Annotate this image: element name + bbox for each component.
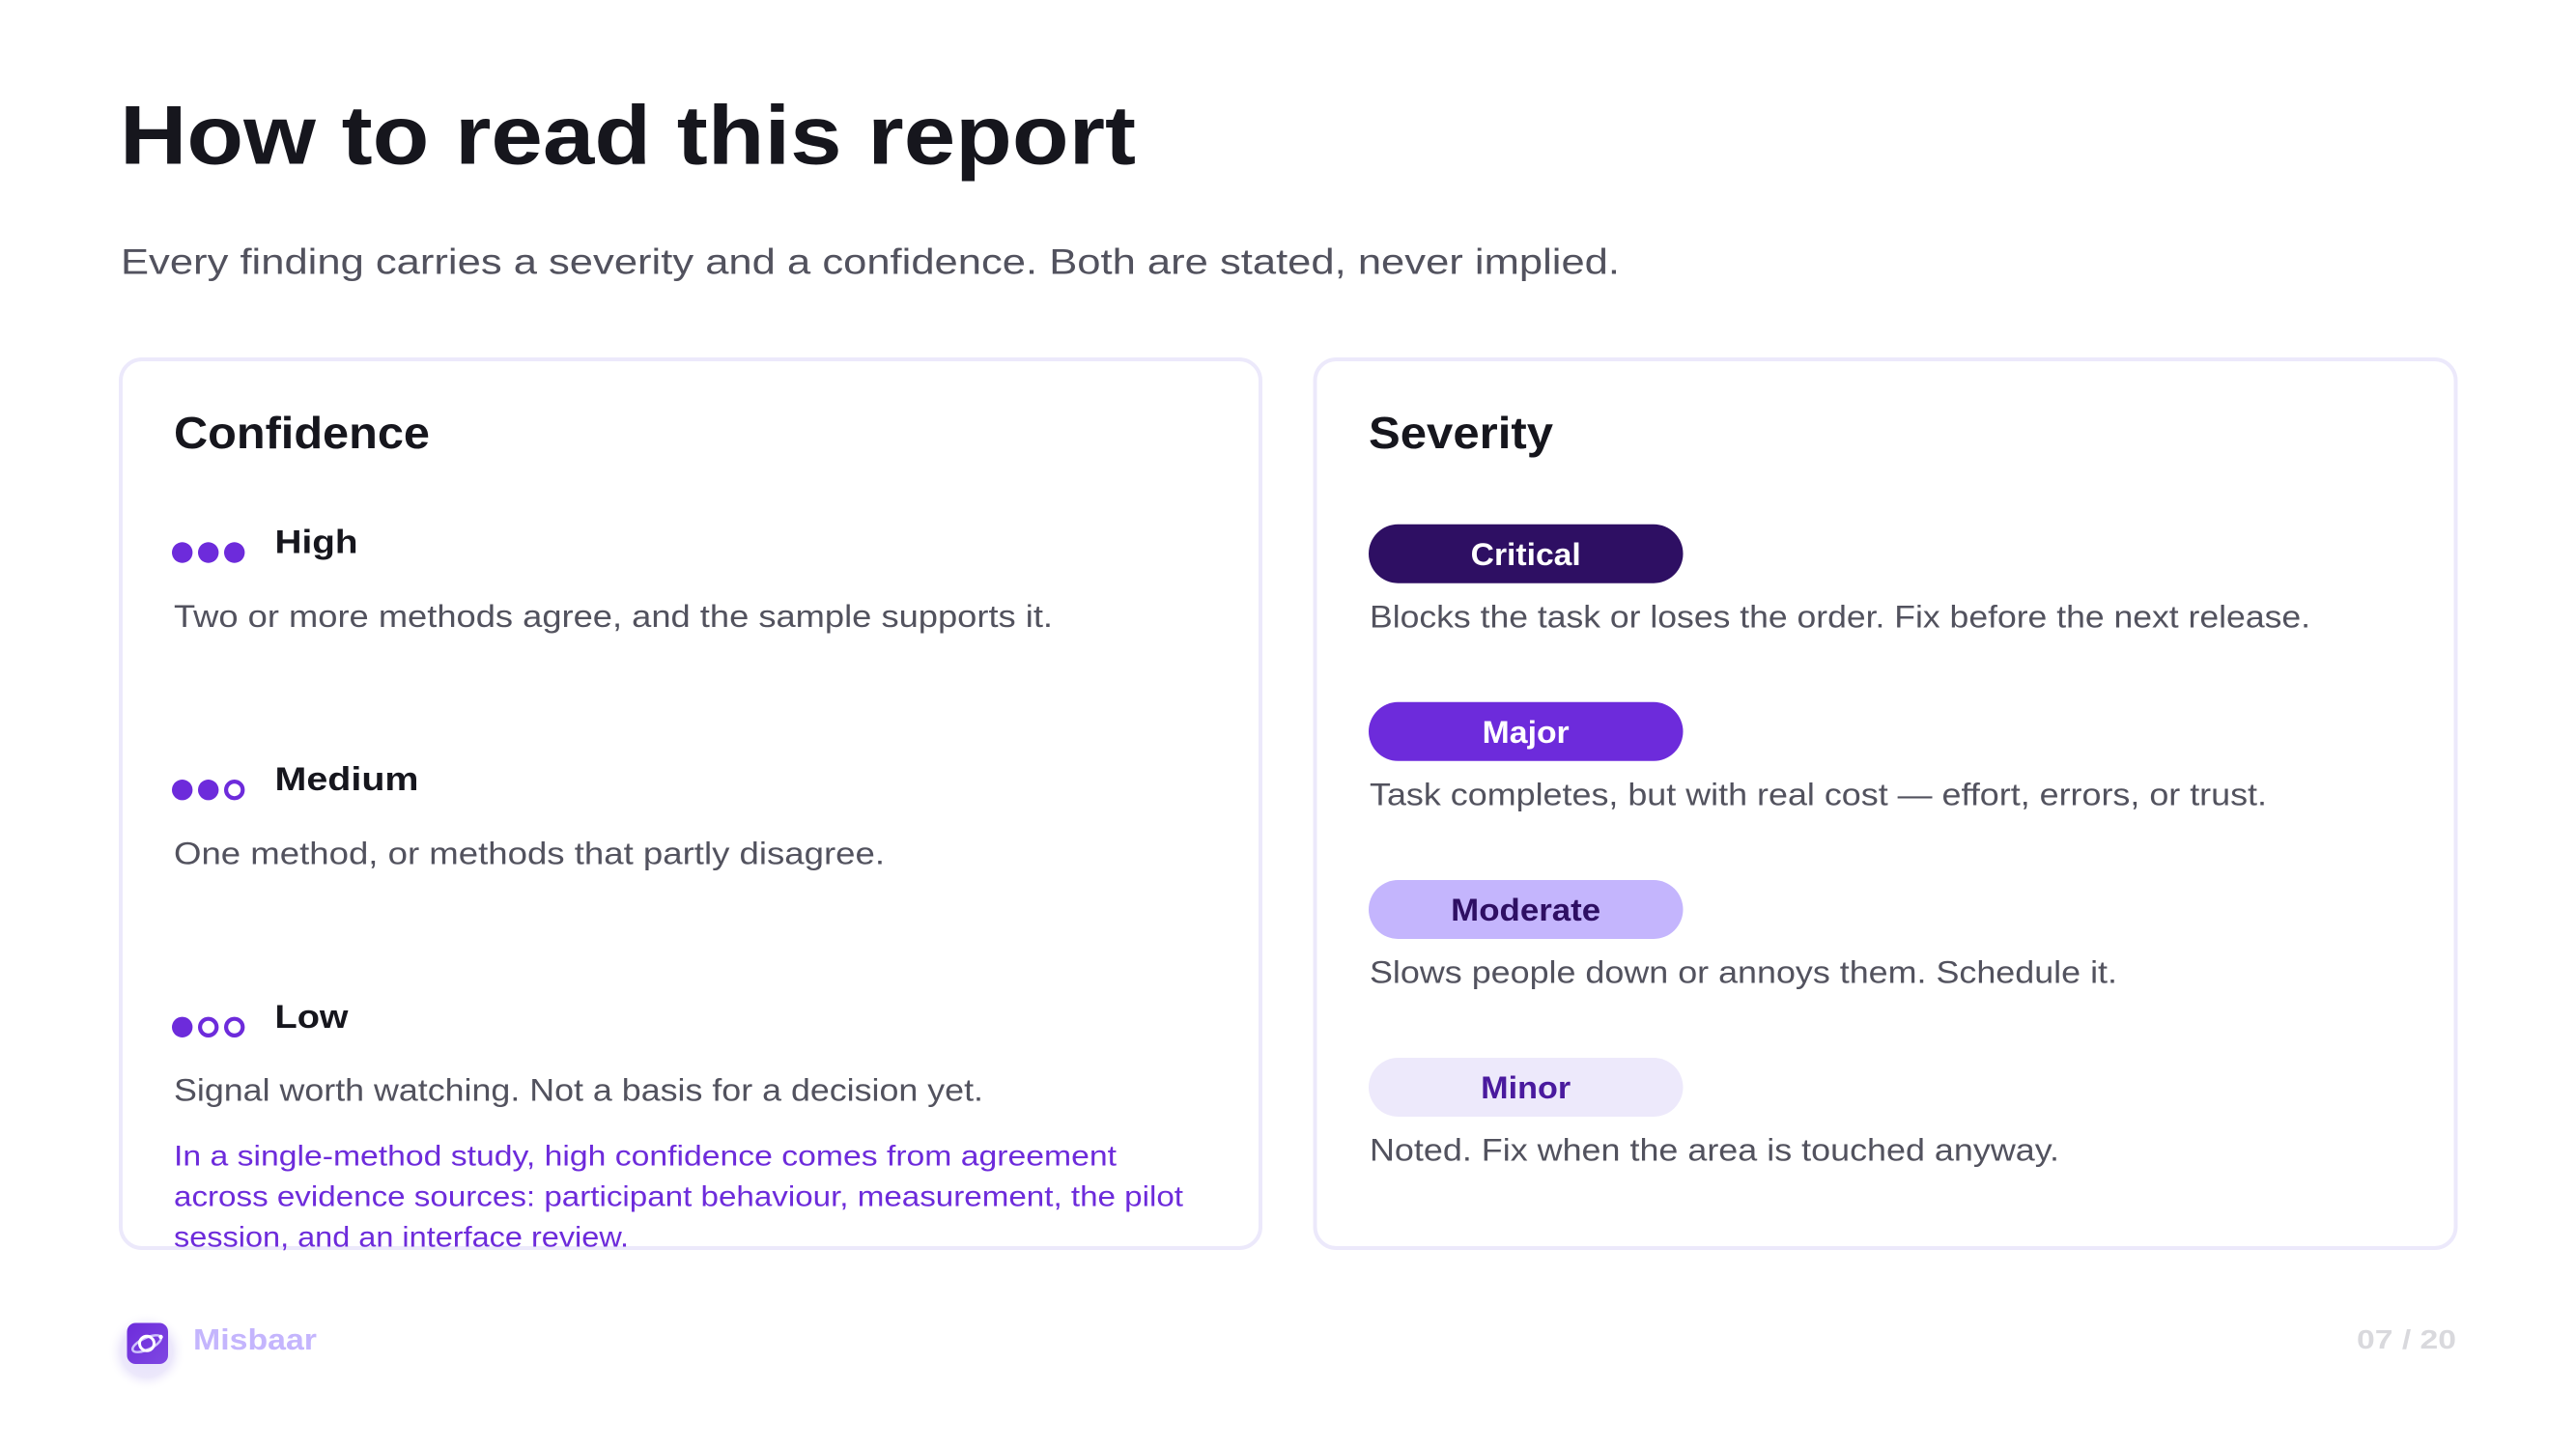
badge: major	[1369, 702, 1683, 761]
description: moderate: Slows people down or annoys them. Schedule it.	[1370, 954, 2117, 989]
panel background	[1316, 359, 2455, 1248]
severity level: critical	[1369, 525, 2310, 634]
label: low: Low	[274, 999, 349, 1036]
badge: moderate: Moderate	[1451, 893, 1600, 927]
description: critical: Blocks the task or loses the order. Fix before the next release.	[1370, 599, 2310, 634]
title: How to read this report	[120, 89, 1136, 182]
badge: moderate	[1369, 880, 1683, 939]
severity level: minor	[1369, 1058, 2059, 1168]
page number: 07 / 20	[2357, 1324, 2456, 1354]
note: single-method study: session, and an interface review.	[174, 1221, 629, 1254]
panel: severity	[1316, 359, 2455, 1248]
badge: minor: Minor	[1481, 1070, 1571, 1105]
icon: three filled dots	[172, 542, 244, 563]
confidence level: low	[172, 999, 983, 1107]
subtitle: Every finding carries a severity and a confidence. Both are stated, never implied.	[121, 242, 1620, 282]
badge: critical: Critical	[1471, 537, 1581, 572]
label: high: High	[274, 524, 357, 560]
badge: major: Major	[1483, 715, 1570, 750]
severity level: moderate	[1369, 880, 2117, 989]
description: major: Task completes, but with real cost — effort, errors, or trust.	[1370, 777, 2267, 811]
footer brand name: Misbaar	[193, 1322, 317, 1356]
heading: confidence: Confidence	[174, 408, 430, 458]
confidence level: high	[172, 524, 1053, 634]
icon: one filled dot, two hollow	[172, 1017, 242, 1037]
icon: two filled dots, one hollow	[172, 780, 242, 800]
confidence level: medium	[172, 761, 885, 871]
badge: critical	[1369, 525, 1683, 583]
heading: severity: Severity	[1369, 408, 1553, 458]
description: high: Two or more methods agree, and the sample supports it.	[174, 599, 1053, 634]
note: single-method study	[174, 1141, 1184, 1254]
label: medium: Medium	[274, 761, 419, 798]
description: minor: Noted. Fix when the area is touched anyway.	[1370, 1133, 2059, 1168]
severity level: major	[1369, 702, 2267, 811]
description: low: Signal worth watching. Not a basis for a decision yet.	[174, 1072, 983, 1107]
note: single-method study: across evidence sources: participant behaviour, measurement, the pilot	[174, 1180, 1184, 1213]
panel background	[121, 359, 1260, 1248]
badge: minor	[1369, 1058, 1683, 1117]
footer logo	[107, 1312, 186, 1391]
panel: confidence	[121, 359, 1260, 1254]
note: single-method study: In a single-method study, high confidence comes from agreement	[174, 1141, 1118, 1173]
description: medium: One method, or methods that partly disagree.	[174, 837, 885, 871]
